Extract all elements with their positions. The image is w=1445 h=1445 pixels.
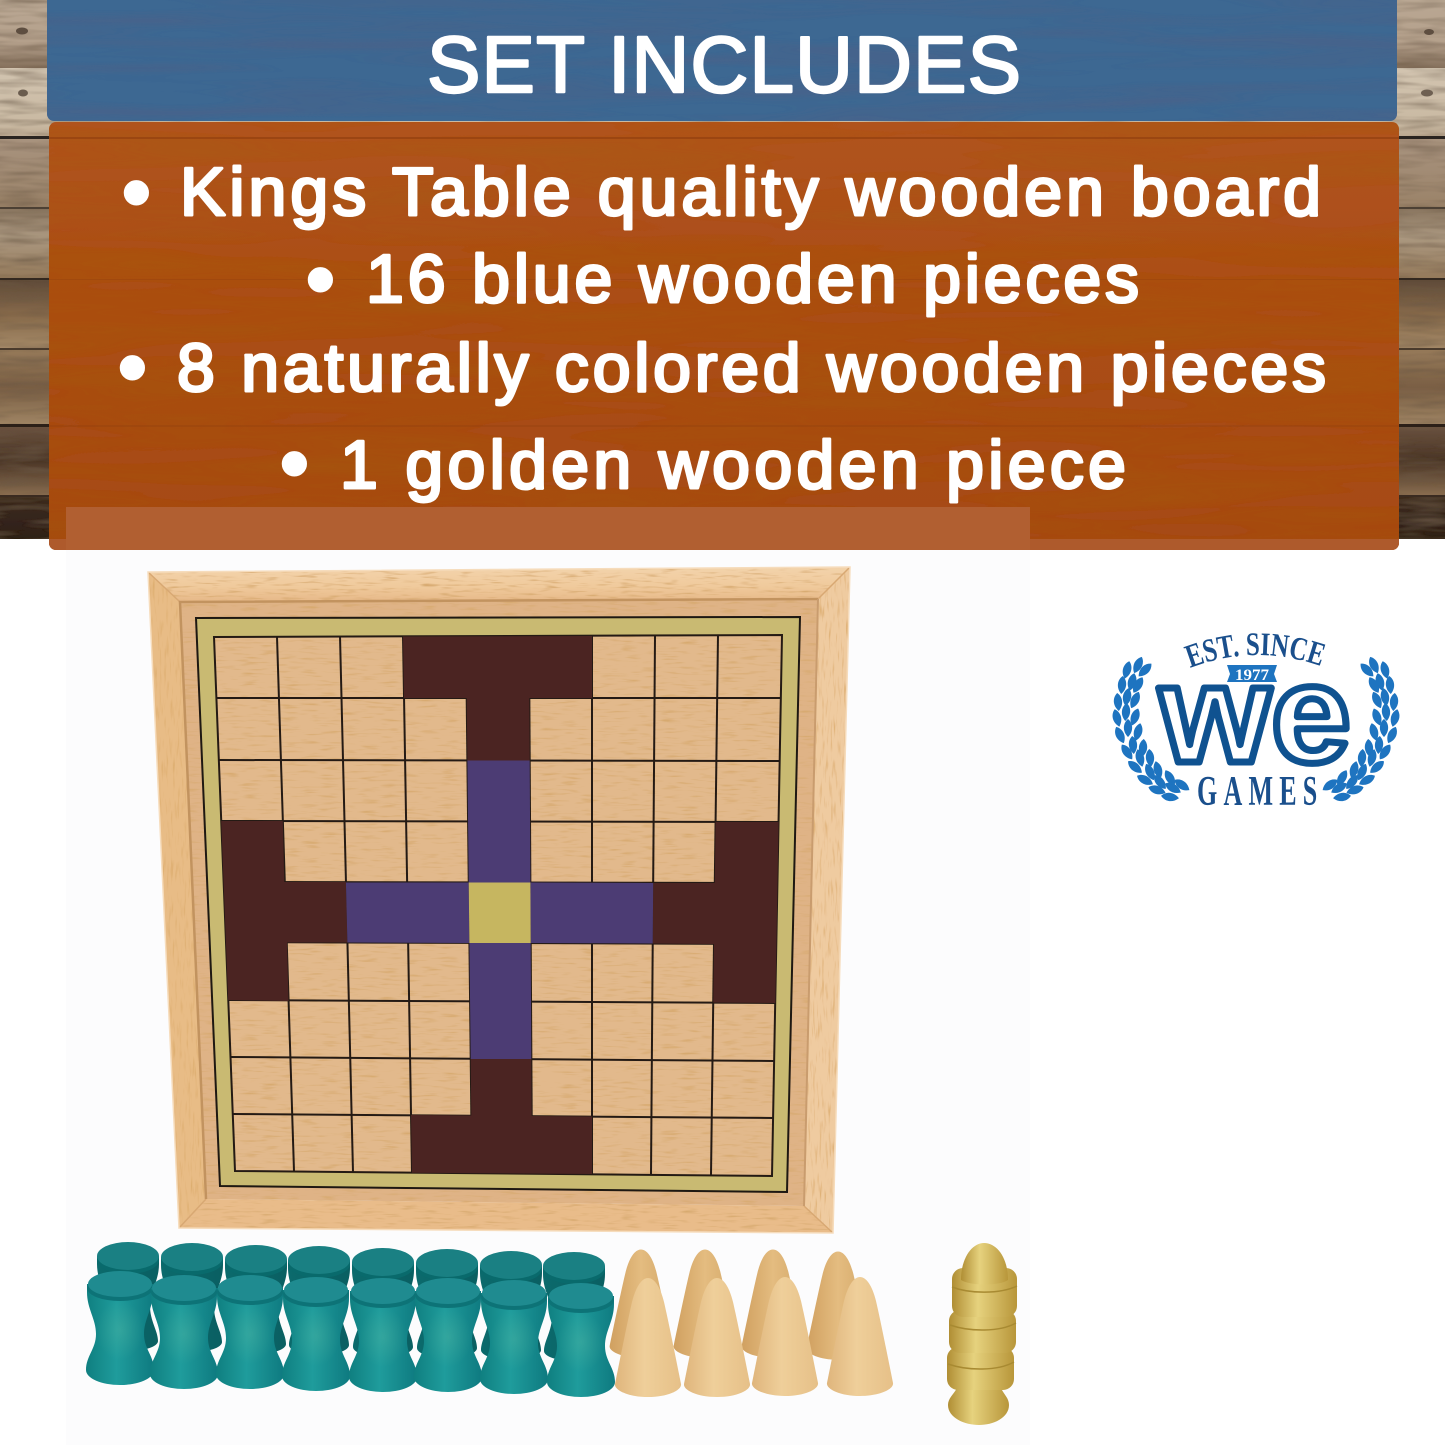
logo: WE Games: EST. SINCE (1183, 633, 1326, 668)
we wordmark: we (1158, 635, 1351, 792)
list item: board: Kings Table quality wooden board (180, 154, 1321, 230)
grid lines (214, 635, 782, 1176)
recessed board surface (180, 599, 818, 1206)
blue wooden pieces (86, 1242, 615, 1397)
front row (86, 1271, 615, 1397)
list item: blue pieces: 16 blue wooden pieces (366, 241, 1139, 317)
title: SET INCLUDES (427, 20, 1021, 109)
list item: natural pieces: • (117, 317, 148, 416)
photo backdrop (66, 539, 1030, 1445)
back cones (610, 1249, 869, 1360)
list item: golden piece: • (279, 413, 310, 512)
gold centre square (469, 882, 531, 943)
light squares (214, 635, 782, 1176)
panel: title banner (47, 0, 1397, 121)
golden wooden piece (947, 1243, 1017, 1425)
panel: contents list (49, 122, 1399, 550)
logo: WE Games (1112, 633, 1400, 815)
natural wooden pieces (610, 1249, 893, 1397)
wooden frame (148, 567, 850, 1233)
games: GAMES (1197, 768, 1323, 815)
front cones (615, 1277, 893, 1397)
gold border (196, 617, 800, 1192)
list item: blue pieces: • (305, 229, 336, 328)
purple cross arms (346, 760, 653, 1059)
1977: 1977 (1235, 667, 1269, 684)
list item: natural pieces: 8 naturally colored wooden pieces (177, 330, 1326, 406)
back row (97, 1242, 605, 1361)
list item: board: • (121, 142, 152, 241)
laurel wreath left (1111, 655, 1192, 802)
1977 banner (1227, 665, 1277, 682)
wood plank background (0, 0, 1445, 539)
game board (148, 567, 850, 1233)
dark brown cross (221, 636, 779, 1174)
est. since (1190, 655, 1326, 668)
laurel wreath right (1320, 655, 1401, 802)
list item: golden piece: 1 golden wooden piece (340, 427, 1126, 503)
